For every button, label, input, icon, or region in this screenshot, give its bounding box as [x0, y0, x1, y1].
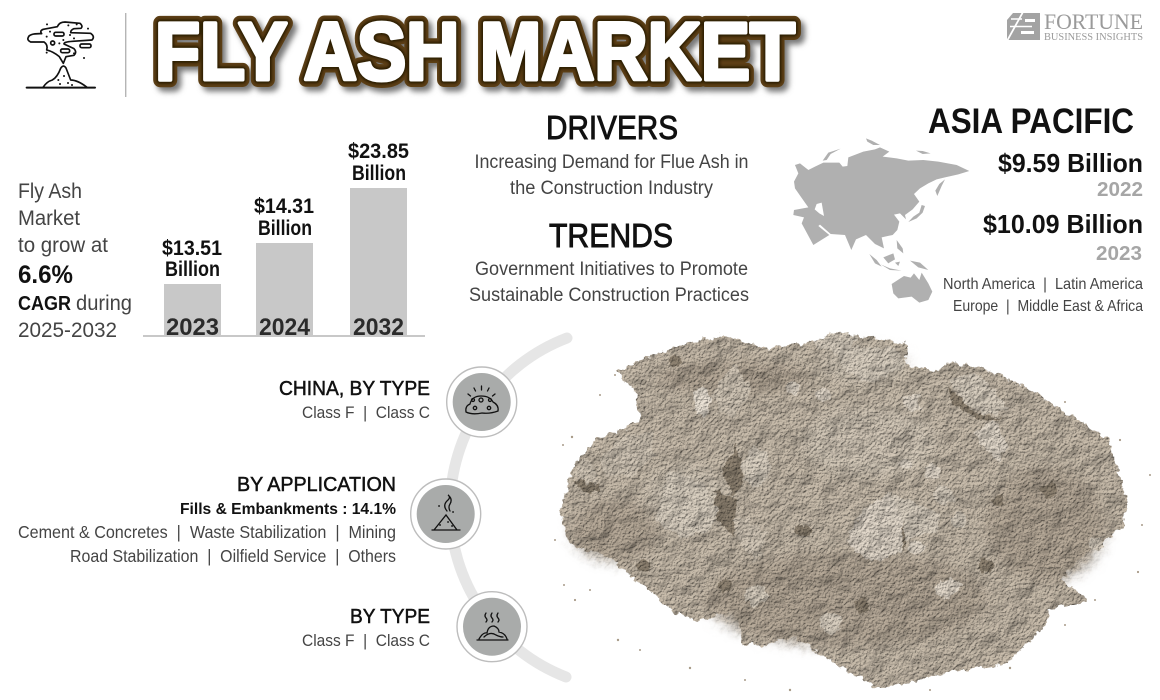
icon: by application: [411, 479, 481, 549]
text block: drivers: Increasing Demand for Flue Ash in: [474, 152, 748, 173]
text block: trends: Sustainable Construction Practices: [469, 285, 749, 306]
text block: Asia Pacific figures: [928, 102, 1143, 315]
text block: Asia Pacific figures: 2022: [1097, 179, 1143, 201]
logo: Fortune Business Insights: BUSINESS INSIGHTS: [1044, 32, 1143, 43]
bar chart: market size: Billion: [258, 217, 312, 240]
text block: CAGR statement: to grow at: [18, 234, 108, 257]
icon: by type: [457, 592, 527, 662]
text block: CAGR statement: [18, 180, 132, 342]
text block: drivers: [474, 109, 748, 199]
bar chart: market size: $14.31: [254, 195, 314, 218]
icon: China by type: [447, 367, 517, 437]
bar chart: market size: [143, 140, 425, 341]
title: FLY ASH MARKET: [155, 6, 795, 98]
image: pile of fly ash: [560, 333, 1127, 689]
text block: trends: [469, 217, 749, 306]
text block: trends: TRENDS: [549, 217, 673, 254]
text block: CAGR statement: during: [76, 292, 132, 315]
text block: trends: Government Initiatives to Promote: [475, 259, 748, 280]
text block: CAGR statement: Market: [18, 207, 80, 230]
text block: China, by type: Class F | Class C: [302, 403, 430, 422]
text block: Asia Pacific figures: ASIA PACIFIC: [928, 102, 1134, 141]
text block: by application: Road Stabilization | Oilfield Service | Others: [70, 546, 396, 566]
logo: Fortune Business Insights: FORTUNE: [1044, 9, 1143, 34]
bar chart: market size: 2024: [259, 314, 311, 341]
text block: CAGR statement: Fly Ash: [18, 180, 82, 203]
bar chart: market size: Billion: [165, 258, 220, 281]
bar chart: market size: $13.51: [162, 237, 222, 260]
bar chart: market size: 2023: [166, 314, 219, 341]
text block: by type: Class F | Class C: [302, 631, 430, 650]
text block: drivers: DRIVERS: [546, 109, 678, 146]
text block: China, by type: [279, 378, 430, 422]
text block: Asia Pacific figures: $10.09 Billion: [983, 209, 1143, 239]
text block: by application: [18, 474, 396, 566]
icon: fly ash cloud over pile: [27, 22, 95, 88]
map: Asia Pacific: [793, 138, 969, 303]
text block: by application: Fills & Embankments : 14.1%: [180, 501, 396, 518]
text block: CAGR statement: CAGR: [18, 293, 71, 315]
bar chart: market size: $23.85: [348, 140, 409, 163]
text block: by application: BY APPLICATION: [237, 474, 396, 496]
title: FLY ASH MARKET: [159, 11, 799, 102]
text block: Asia Pacific figures: 2023: [1096, 243, 1142, 265]
text block: by type: [302, 606, 430, 650]
text block: CAGR statement: 6.6%: [18, 261, 73, 289]
text block: Asia Pacific figures: North America | Latin America: [943, 276, 1143, 293]
logo: Fortune Business Insights: [1007, 9, 1143, 43]
title: FLY ASH MARKET: [155, 6, 795, 98]
text block: CAGR statement: 2025-2032: [18, 319, 117, 342]
bar chart: market size: Billion: [352, 162, 406, 185]
text block: China, by type: CHINA, BY TYPE: [279, 378, 430, 400]
scattered ash particles: [554, 367, 1151, 691]
bar chart: market size: 2032: [353, 314, 404, 341]
header divider: [125, 13, 126, 97]
text block: by application: Cement & Concretes | Waste Stabilization | Mining: [18, 522, 396, 542]
text block: Asia Pacific figures: $9.59 Billion: [998, 148, 1143, 178]
text block: drivers: the Construction Industry: [510, 178, 713, 199]
text block: by type: BY TYPE: [350, 606, 430, 628]
title: FLY ASH MARKET: [155, 6, 795, 98]
arc connector: [450, 338, 567, 677]
